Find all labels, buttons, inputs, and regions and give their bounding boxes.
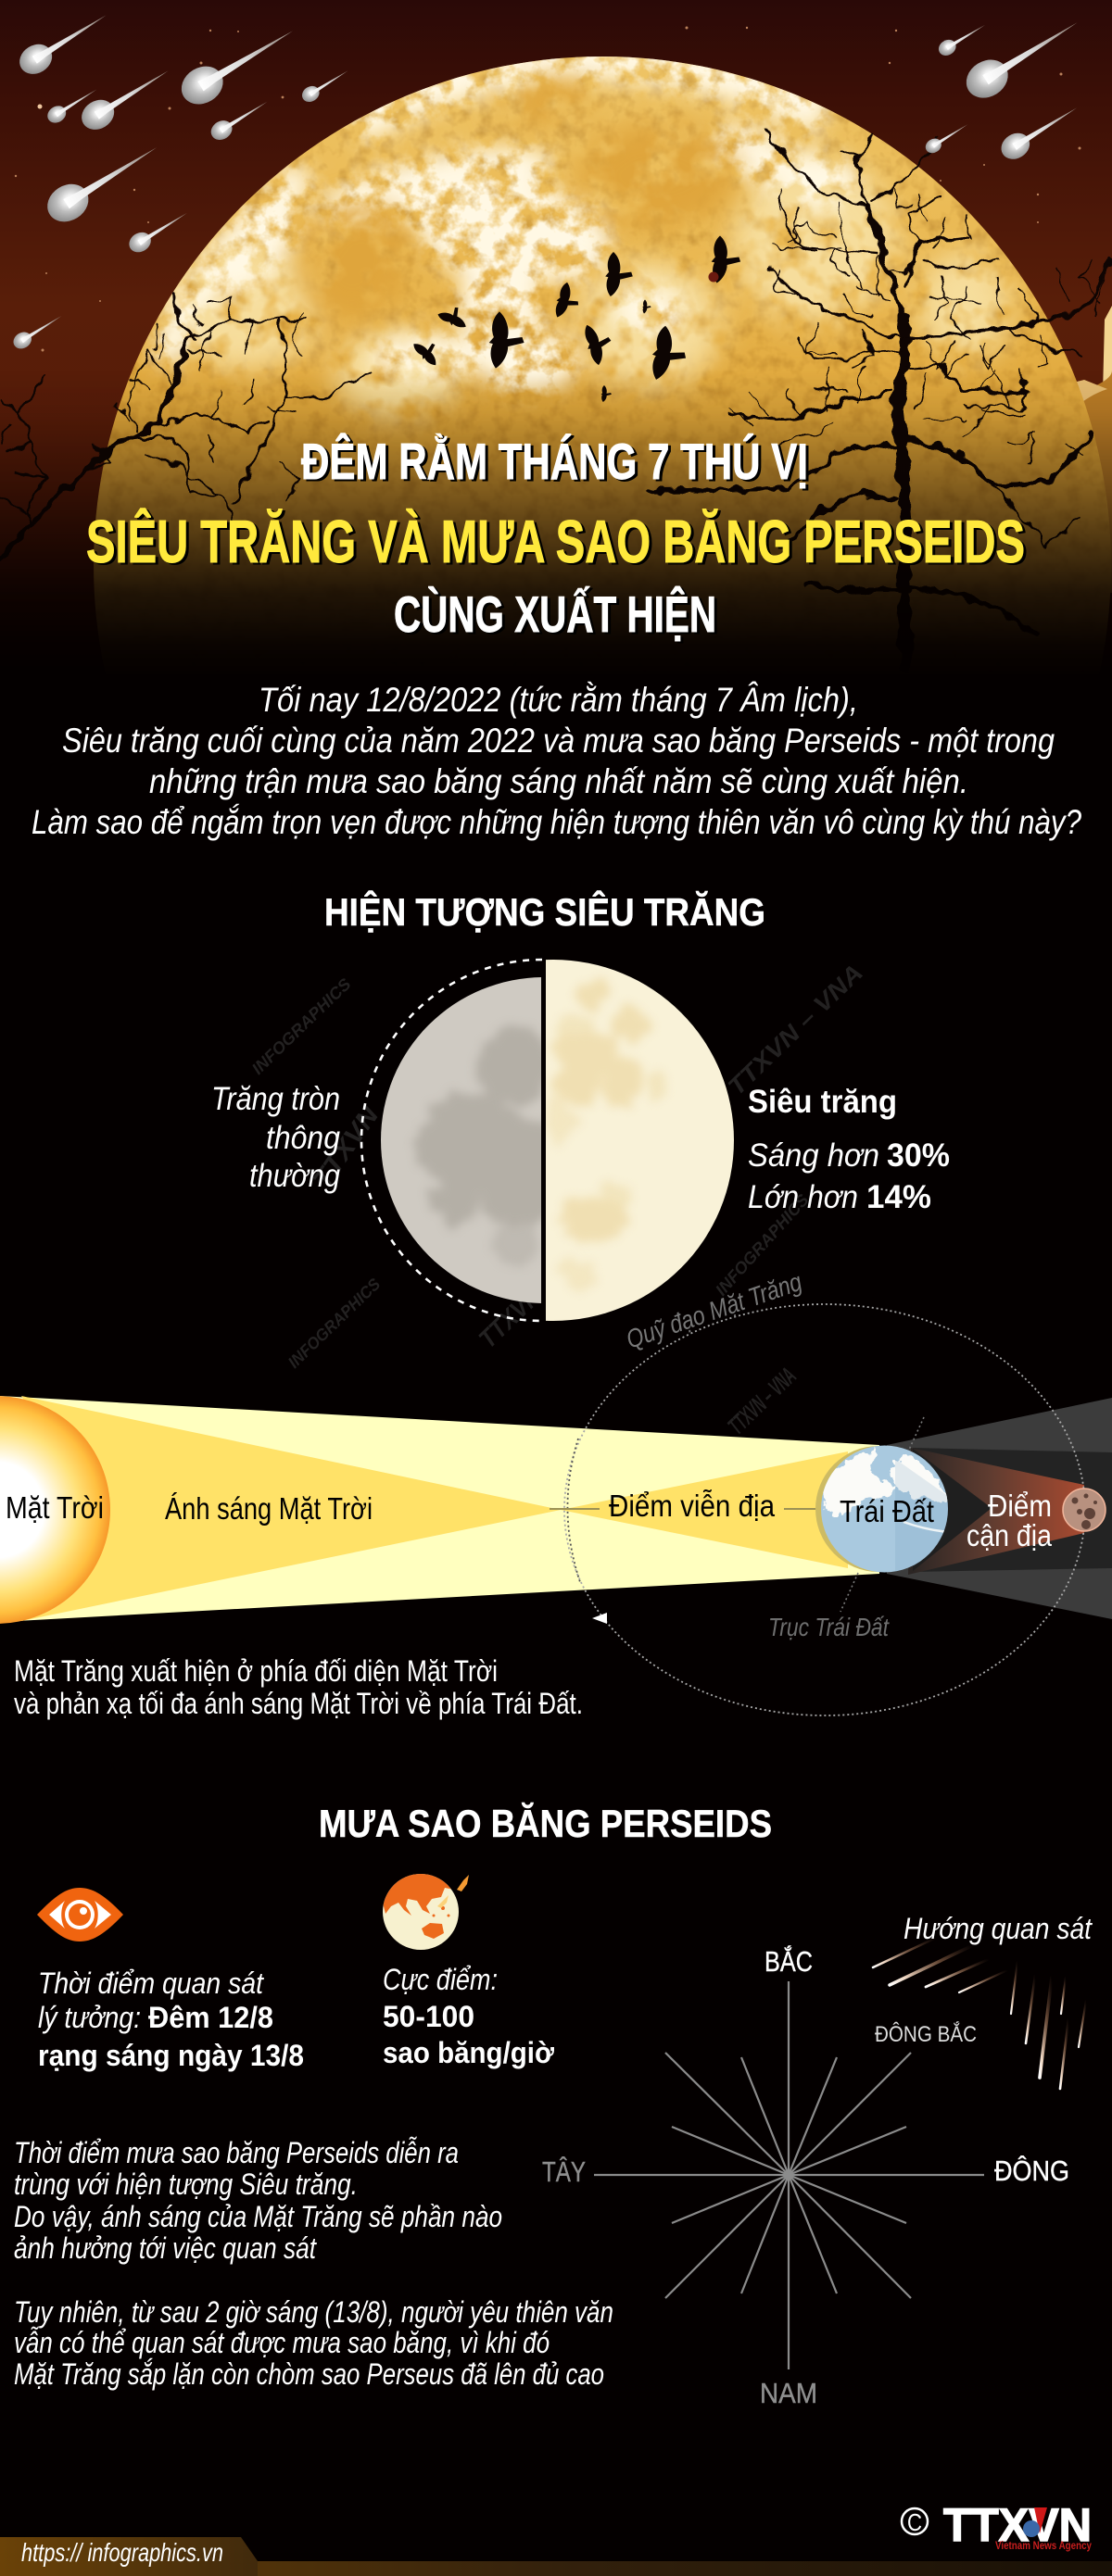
- silhouette trees: [0, 130, 1112, 667]
- stars: [15, 26, 1080, 352]
- bird flock: [410, 235, 740, 402]
- title: CÙNG XUẤT HIỆN: [394, 585, 716, 643]
- right tree twigs: [732, 190, 1112, 463]
- text: ideal viewing time: Đêm 12/8: [148, 2001, 273, 2034]
- diagram labels: Điểm viễn địa: [609, 1489, 776, 1523]
- label: supermoon stats: 30%: [887, 1137, 950, 1174]
- text: peak rate: Cực điểm:: [383, 1963, 498, 1996]
- heading: Perseids: MƯA SAO BĂNG PERSEIDS: [319, 1802, 772, 1845]
- diagram labels: [6, 1489, 1053, 1552]
- earth axis: [840, 1417, 924, 1612]
- big full moon: [13, 28, 1110, 630]
- label: moon orbit: Quỹ đạo Mặt Trăng: [623, 1267, 805, 1354]
- hero night sky panel: [0, 0, 1112, 641]
- label: supermoon stats: [748, 1084, 950, 1215]
- text: ideal viewing time: lý tưởng:: [38, 2001, 141, 2034]
- text: explanation: Tuy nhiên, từ sau 2 giờ sáng (13/8), người yêu thiên văn: [14, 2295, 613, 2329]
- pale cream mid-tones: [158, 157, 1010, 417]
- text: ideal viewing time: [38, 1967, 304, 2072]
- intro text: những trận mưa sao băng sáng nhất năm sẽ cùng xuất hiện.: [149, 762, 968, 800]
- text: explanation: Thời điểm mưa sao băng Perseids diễn ra: [14, 2136, 459, 2169]
- diagram caption: [14, 1654, 583, 1720]
- diagram labels: Trái Đất: [840, 1494, 934, 1528]
- text: explanation: vẫn có thể quan sát được mưa sao băng, vì khi đó: [14, 2326, 550, 2359]
- watermarks: TTXVN: [308, 1100, 385, 1193]
- logo: TTXVN: Vietnam News Agency: [995, 2539, 1092, 2552]
- compass labels: ĐÔNG: [994, 2155, 1069, 2187]
- watermarks: INFOGRAPHICS: [712, 1190, 813, 1300]
- orbit diagram: [0, 1304, 1112, 1715]
- watermarks: [248, 959, 868, 1439]
- label: supermoon stats: Siêu trăng: [748, 1084, 897, 1120]
- divider: [542, 960, 546, 1321]
- sun: [0, 1396, 110, 1624]
- watermarks: INFOGRAPHICS: [284, 1275, 384, 1372]
- text: explanation: trùng với hiện tượng Siêu trăng.: [14, 2168, 358, 2201]
- label: earth axis: Trục Trái Đất: [768, 1613, 890, 1641]
- compass labels: ĐÔNG BẮC: [875, 2021, 977, 2047]
- text: peak rate: [383, 1963, 554, 2069]
- label: normal full moon: thông: [266, 1120, 340, 1156]
- darker maria: [283, 80, 737, 342]
- text: explanation: Do vậy, ánh sáng của Mặt Trăng sẽ phần nào: [14, 2200, 502, 2233]
- compass rose: [594, 1981, 984, 2369]
- diagram caption: và phản xạ tối đa ánh sáng Mặt Trời về phía Trái Đất.: [14, 1687, 583, 1720]
- text: peak rate: sao băng/giờ: [383, 2036, 554, 2069]
- diagram labels: Ánh sáng Mặt Trời: [165, 1491, 373, 1526]
- intro text: [32, 681, 1081, 841]
- label: normal full moon: Trăng tròn: [211, 1081, 340, 1117]
- text: ideal viewing time: rạng sáng ngày 13/8: [38, 2039, 304, 2072]
- sunlight beam: [0, 1396, 879, 1622]
- right tree trunk and main branches: [897, 398, 906, 667]
- text: explanation: ảnh hưởng tới việc quan sát: [14, 2231, 317, 2265]
- icon: globe with meteor: [382, 1871, 469, 1954]
- title: ĐÊM RẰM THÁNG 7 THÚ VỊ: [301, 433, 808, 490]
- small meteor streaks: [873, 1938, 1086, 2089]
- orbit size dashed outline: [361, 960, 542, 1321]
- compass labels: [542, 1944, 1069, 2409]
- diagram caption: Mặt Trăng xuất hiện ở phía đối diện Mặt Trời: [14, 1654, 498, 1688]
- far-left tree: [0, 377, 46, 531]
- heading: supermoon: HIỆN TƯỢNG SIÊU TRĂNG: [324, 889, 765, 934]
- icon: eye: [37, 1888, 123, 1941]
- normal full moon half: [381, 977, 541, 1303]
- perigee moon: [1063, 1489, 1106, 1531]
- intro text: Tối nay 12/8/2022 (tức rằm tháng 7 Âm lịch),: [259, 681, 858, 719]
- compass labels: NAM: [760, 2377, 817, 2409]
- right cloud: [1077, 306, 1112, 593]
- label: normal full moon: [211, 1081, 340, 1194]
- label: supermoon stats: 14%: [866, 1179, 931, 1215]
- text: explanation: [14, 2136, 613, 2391]
- label: supermoon stats: Lớn hơn: [748, 1179, 858, 1215]
- watermarks: TTXVN: [474, 1281, 547, 1353]
- compass labels: BẮC: [764, 1944, 813, 1978]
- supermoon half: [546, 960, 734, 1321]
- earth shadow cones: [887, 1398, 1112, 1619]
- footer url: https:// infographics.vn: [21, 2538, 223, 2567]
- orbit direction arrow: [592, 1613, 607, 1624]
- label: normal full moon: thường: [249, 1158, 340, 1194]
- text: peak rate: 50-100: [383, 2000, 474, 2033]
- earth: [815, 1445, 954, 1578]
- footer band: [0, 2537, 1112, 2576]
- diagram labels: Điểm: [988, 1489, 1052, 1523]
- leader lines: [550, 1508, 815, 1510]
- compass labels: TÂY: [542, 2155, 586, 2188]
- title: [86, 433, 1025, 643]
- text: explanation: Mặt Trăng sắp lặn còn chòm sao Perseus đã lên đủ cao: [14, 2357, 604, 2391]
- logo: TTXVN: TTXVN: [943, 2499, 1092, 2551]
- label: viewing direction: Hướng quan sát: [904, 1912, 1093, 1945]
- meteors: [10, 4, 1087, 352]
- hero fade to black: [0, 371, 1112, 676]
- moon comparison: [361, 960, 734, 1321]
- watermarks: INFOGRAPHICS: [248, 974, 354, 1078]
- text: ideal viewing time: Thời điểm quan sát: [38, 1967, 264, 2000]
- watermarks: TTXVN – VNA: [722, 1362, 802, 1439]
- moon orbit dotted ellipse: [564, 1304, 1085, 1715]
- logo: TTXVN: C: [907, 2508, 922, 2536]
- diagram labels: Mặt Trời: [6, 1490, 104, 1525]
- bright highlands: [162, 57, 857, 393]
- left tree main: [0, 340, 188, 562]
- watermarks: TTXVN – VNA: [722, 959, 868, 1100]
- diagram labels: cận địa: [967, 1518, 1053, 1552]
- label: supermoon stats: Sáng hơn: [748, 1137, 879, 1174]
